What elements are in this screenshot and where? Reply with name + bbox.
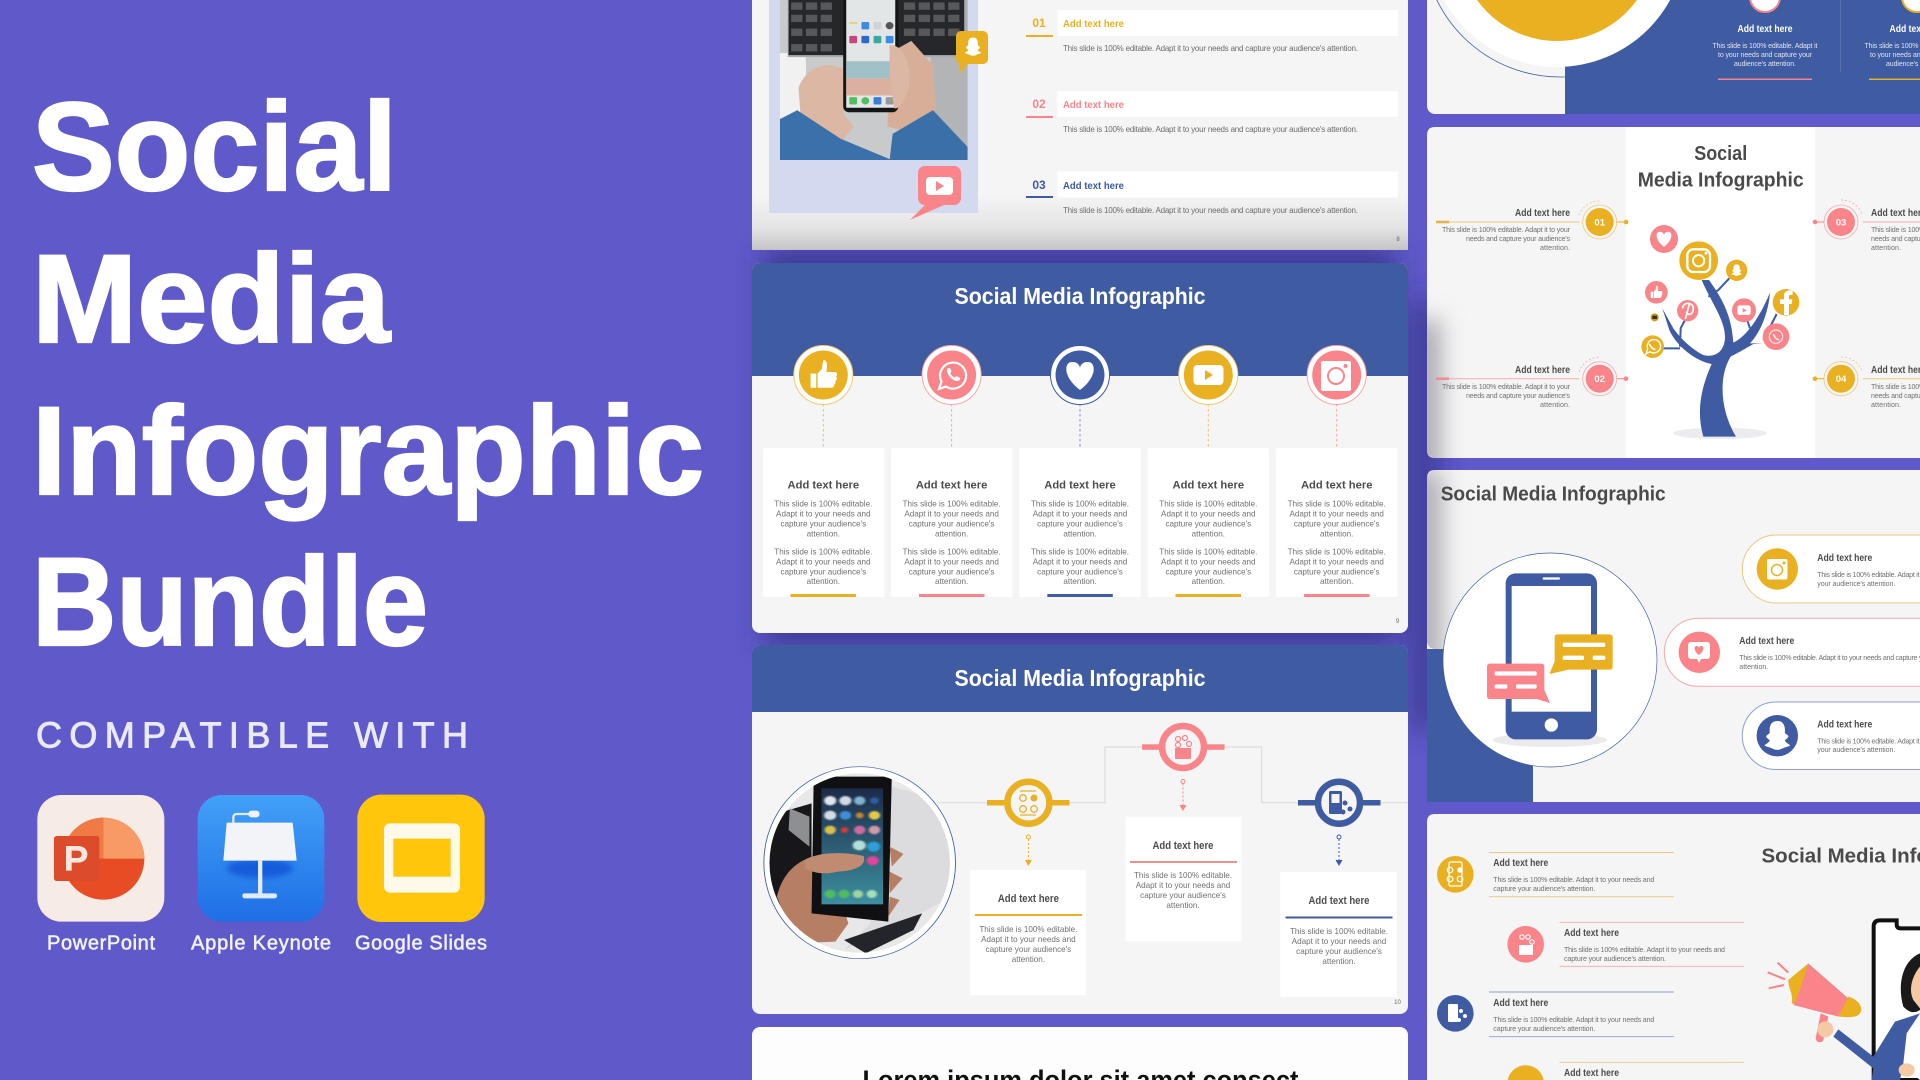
photo panel <box>769 0 978 213</box>
icon: instagram <box>1307 346 1366 404</box>
item 03 <box>1026 172 1398 215</box>
card 2: Add text here <box>916 480 987 492</box>
card 1: capture your audience's <box>780 520 866 528</box>
card 5: capture your audience's <box>1294 567 1380 576</box>
item 02: This slide is 100% editable. Adapt it to your needs and capture your audience's attention. <box>1063 125 1358 134</box>
item 02: attention. <box>1540 401 1570 409</box>
panel: slide megaphone <box>1427 814 1920 1080</box>
card 5 <box>1276 448 1398 597</box>
icon: youtube bubble <box>910 166 961 220</box>
card 5: Adapt it to your needs and <box>1289 558 1384 566</box>
arrow 2 <box>1180 780 1186 810</box>
row 1: This slide is 100% editable. Adapt it to your needs and <box>1493 876 1654 884</box>
card 2: Adapt it to your needs and <box>904 510 999 519</box>
card 1: attention. <box>807 529 840 538</box>
pill 1: Add text here <box>1817 553 1873 564</box>
item 01: Add text here <box>1063 19 1124 30</box>
card 4: Adapt it to your needs and <box>1161 510 1256 519</box>
app labels: Apple Keynote <box>191 932 331 954</box>
card 1 <box>970 870 1086 995</box>
text column 2 <box>1864 24 1920 80</box>
heading: Social Media Infographic <box>954 665 1206 691</box>
item 02: This slide is 100% editable. Adapt it to your <box>1442 383 1571 391</box>
item 03: 03 <box>1836 218 1846 228</box>
item 03: This slide is 100% editable. Adapt it to your needs and capture your audience's attention. <box>1063 206 1358 215</box>
text column 1: Add text here <box>1738 24 1793 35</box>
card 1: capture your audience's <box>986 945 1071 954</box>
text column 1: audience's attention. <box>1734 61 1796 68</box>
heading: Social Media Infographic <box>954 283 1206 309</box>
pill 2: Add text here <box>1739 636 1795 647</box>
card 4: Adapt it to your needs and <box>1161 558 1256 566</box>
row 2: Add text here <box>1564 928 1619 939</box>
card 2: This slide is 100% editable. <box>1134 871 1232 880</box>
icon: youtube <box>1179 346 1238 404</box>
row 1: Add text here <box>1493 858 1549 869</box>
panel: slide 8 list: 8 <box>1396 237 1400 243</box>
card 1: Add text here <box>998 893 1059 905</box>
pill 2: attention. <box>1739 663 1768 671</box>
card 3: Adapt it to your needs and <box>1033 510 1127 519</box>
card 3: Add text here <box>1044 480 1116 492</box>
card 2: Add text here <box>1152 840 1214 852</box>
slide shadows <box>765 250 1438 730</box>
panel: slide phone chat <box>1410 470 1920 802</box>
card 3: capture your audience's <box>1037 520 1123 528</box>
card 4: Add text here <box>1173 480 1244 492</box>
item 04 <box>1813 357 1920 409</box>
item 04: attention. <box>1871 401 1901 409</box>
card 5: attention. <box>1320 529 1353 538</box>
card 2: attention. <box>935 577 968 586</box>
card 5: This slide is 100% editable. <box>1288 500 1386 508</box>
item 02: Add text here <box>1063 100 1124 111</box>
item 01 <box>1436 201 1628 252</box>
card 1: attention. <box>807 577 840 586</box>
text column 1 <box>1712 24 1818 80</box>
item 03 <box>1813 200 1920 252</box>
row 2: capture your audience's attention. <box>1564 955 1666 963</box>
item 03: Add text here <box>1063 181 1124 192</box>
panel: slide 8 list <box>752 0 1408 250</box>
item 01: 01 <box>1032 16 1046 30</box>
panel: slide top right <box>1423 0 1920 114</box>
app labels <box>47 932 487 954</box>
text column 1: This slide is 100% editable. Adapt it <box>1712 43 1818 50</box>
card 1: Adapt it to your needs and <box>776 510 871 519</box>
illustration: megaphone and presenter <box>1768 920 1920 1080</box>
item 03: 03 <box>1032 178 1046 192</box>
pill 1: your audience's attention. <box>1817 580 1895 588</box>
arrow 3 <box>1336 835 1342 865</box>
card 3: This slide is 100% editable. <box>1031 547 1129 556</box>
icon: whatsapp <box>922 346 981 404</box>
card 1 <box>763 448 884 597</box>
card 4: attention. <box>1192 529 1225 538</box>
row 3: capture your audience's attention. <box>1493 1025 1595 1033</box>
card 1: attention. <box>1012 955 1045 964</box>
title: Infographic <box>32 382 704 521</box>
card 5: This slide is 100% editable. <box>1288 547 1386 556</box>
card 3: Adapt it to your needs and <box>1292 937 1386 946</box>
title: Bundle <box>32 533 428 672</box>
row 4 <box>1507 1062 1744 1080</box>
illustration: phone with chat bubbles <box>1443 553 1657 767</box>
item 04: 04 <box>1836 374 1847 385</box>
card 1: Adapt it to your needs and <box>981 935 1076 944</box>
card 4 <box>1148 448 1269 597</box>
item 03: attention. <box>1871 244 1901 252</box>
panel: slide 10 timeline: 10 <box>1394 1000 1401 1006</box>
item 01: Add text here <box>1515 208 1570 219</box>
title: Media <box>32 230 391 369</box>
subtitle: compatible with: COMPATIBLE WITH <box>36 714 468 756</box>
card 2: capture your audience's <box>1140 891 1226 900</box>
item 02: Add text here <box>1515 365 1570 376</box>
card 3: attention. <box>1322 957 1356 966</box>
card 3: attention. <box>1063 529 1097 538</box>
text column 1: to your needs and capture your <box>1718 52 1813 59</box>
panel: slide tree <box>1427 127 1920 458</box>
card 1: This slide is 100% editable. <box>774 547 872 556</box>
card 5: attention. <box>1320 577 1353 586</box>
heading: Social Media Infographic <box>1441 483 1666 506</box>
card 1: This slide is 100% editable. <box>979 925 1077 934</box>
card 5: capture your audience's <box>1294 520 1380 528</box>
heading: Media Infographic <box>1638 168 1804 192</box>
item 02 <box>1026 91 1398 134</box>
card 2: capture your audience's <box>909 567 994 576</box>
icon: snapchat bubble <box>956 31 988 74</box>
pill 3 <box>1742 702 1920 770</box>
card 1: Adapt it to your needs and <box>776 558 871 566</box>
heading: Social <box>1694 142 1747 165</box>
card 3: capture your audience's <box>1296 947 1382 956</box>
card 3: Adapt it to your needs and <box>1033 558 1127 566</box>
card 3: This slide is 100% editable. <box>1031 500 1129 508</box>
heading <box>1638 142 1804 192</box>
illustration: social tree <box>1641 225 1799 439</box>
card 2: attention. <box>1166 901 1200 910</box>
panel: slide 9 five columns: 9 <box>1396 619 1400 625</box>
item 01: 01 <box>1594 218 1606 228</box>
card 2: Adapt it to your needs and <box>904 558 999 566</box>
card 3: Add text here <box>1308 895 1370 907</box>
title: Social <box>32 78 397 217</box>
arrow 1 <box>1026 835 1031 865</box>
item 01 <box>1026 10 1398 53</box>
row 3 <box>1437 992 1674 1037</box>
pill 1 <box>1742 535 1920 603</box>
card 3 <box>1280 872 1397 997</box>
card 5: Adapt it to your needs and <box>1289 510 1384 519</box>
pill 3: Add text here <box>1817 720 1873 730</box>
app icons <box>37 795 485 922</box>
card 4: attention. <box>1192 577 1225 586</box>
icon: PowerPoint <box>37 795 164 922</box>
icon: like <box>794 346 853 404</box>
item 02: needs and capture your audience's <box>1466 392 1570 400</box>
title <box>32 78 704 672</box>
card 2: This slide is 100% editable. <box>903 500 1001 508</box>
icon: Google Slides <box>357 795 485 922</box>
row 3: This slide is 100% editable. Adapt it to your needs and <box>1493 1016 1654 1024</box>
app labels: PowerPoint <box>47 932 155 954</box>
card 2: This slide is 100% editable. <box>903 547 1001 556</box>
card 2 <box>891 448 1012 597</box>
card 2: capture your audience's <box>909 520 994 528</box>
item 01: attention. <box>1540 244 1570 252</box>
panel: slide 9 five columns <box>752 263 1408 633</box>
node 3 <box>1298 782 1380 824</box>
app labels: Google Slides <box>355 932 487 954</box>
item 01: This slide is 100% editable. Adapt it to your needs and capture your audience's attention. <box>1063 44 1358 53</box>
card 1: Add text here <box>788 480 859 492</box>
panel: lorem slide <box>752 1027 1408 1080</box>
pill 3: your audience's attention. <box>1817 746 1895 754</box>
card 3: This slide is 100% editable. <box>1290 927 1388 936</box>
card 4: capture your audience's <box>1165 520 1251 528</box>
card 1: This slide is 100% editable. <box>774 500 872 508</box>
connector line <box>940 747 1408 803</box>
photo circle <box>764 767 957 959</box>
item 01: This slide is 100% editable. Adapt it to your <box>1442 226 1571 234</box>
icon: heart <box>1050 346 1110 404</box>
node 1 <box>987 782 1070 824</box>
card 3: attention. <box>1063 577 1097 586</box>
connectors <box>823 404 1337 448</box>
icon: Apple Keynote <box>198 795 324 922</box>
card 3: capture your audience's <box>1037 567 1123 576</box>
card 5: Add text here <box>1301 480 1372 492</box>
card 2: attention. <box>935 529 968 538</box>
card 2: Adapt it to your needs and <box>1136 881 1230 890</box>
card 4: This slide is 100% editable. <box>1159 500 1257 508</box>
row 2 <box>1507 922 1744 966</box>
panel: slide 10 timeline <box>752 645 1408 1014</box>
pill 2 <box>1664 618 1920 686</box>
card 2 <box>1126 817 1242 941</box>
row 4: Add text here <box>1564 1068 1619 1079</box>
item 02 <box>1436 357 1628 409</box>
card 4: This slide is 100% editable. <box>1159 547 1257 556</box>
row 1: capture your audience's attention. <box>1493 885 1595 893</box>
icon: pink badge <box>1750 0 1780 12</box>
item 02: 02 <box>1594 374 1605 385</box>
icon: yellow badge <box>1902 0 1920 12</box>
row 2: This slide is 100% editable. Adapt it to your needs and <box>1564 946 1725 954</box>
node 2 <box>1142 726 1224 768</box>
item 01: needs and capture your audience's <box>1466 235 1570 243</box>
card 1: capture your audience's <box>780 567 866 576</box>
item 02: 02 <box>1032 97 1046 111</box>
row 1 <box>1437 852 1674 897</box>
row 3: Add text here <box>1493 998 1549 1009</box>
card 3 <box>1019 448 1141 597</box>
card 4: capture your audience's <box>1165 567 1251 576</box>
